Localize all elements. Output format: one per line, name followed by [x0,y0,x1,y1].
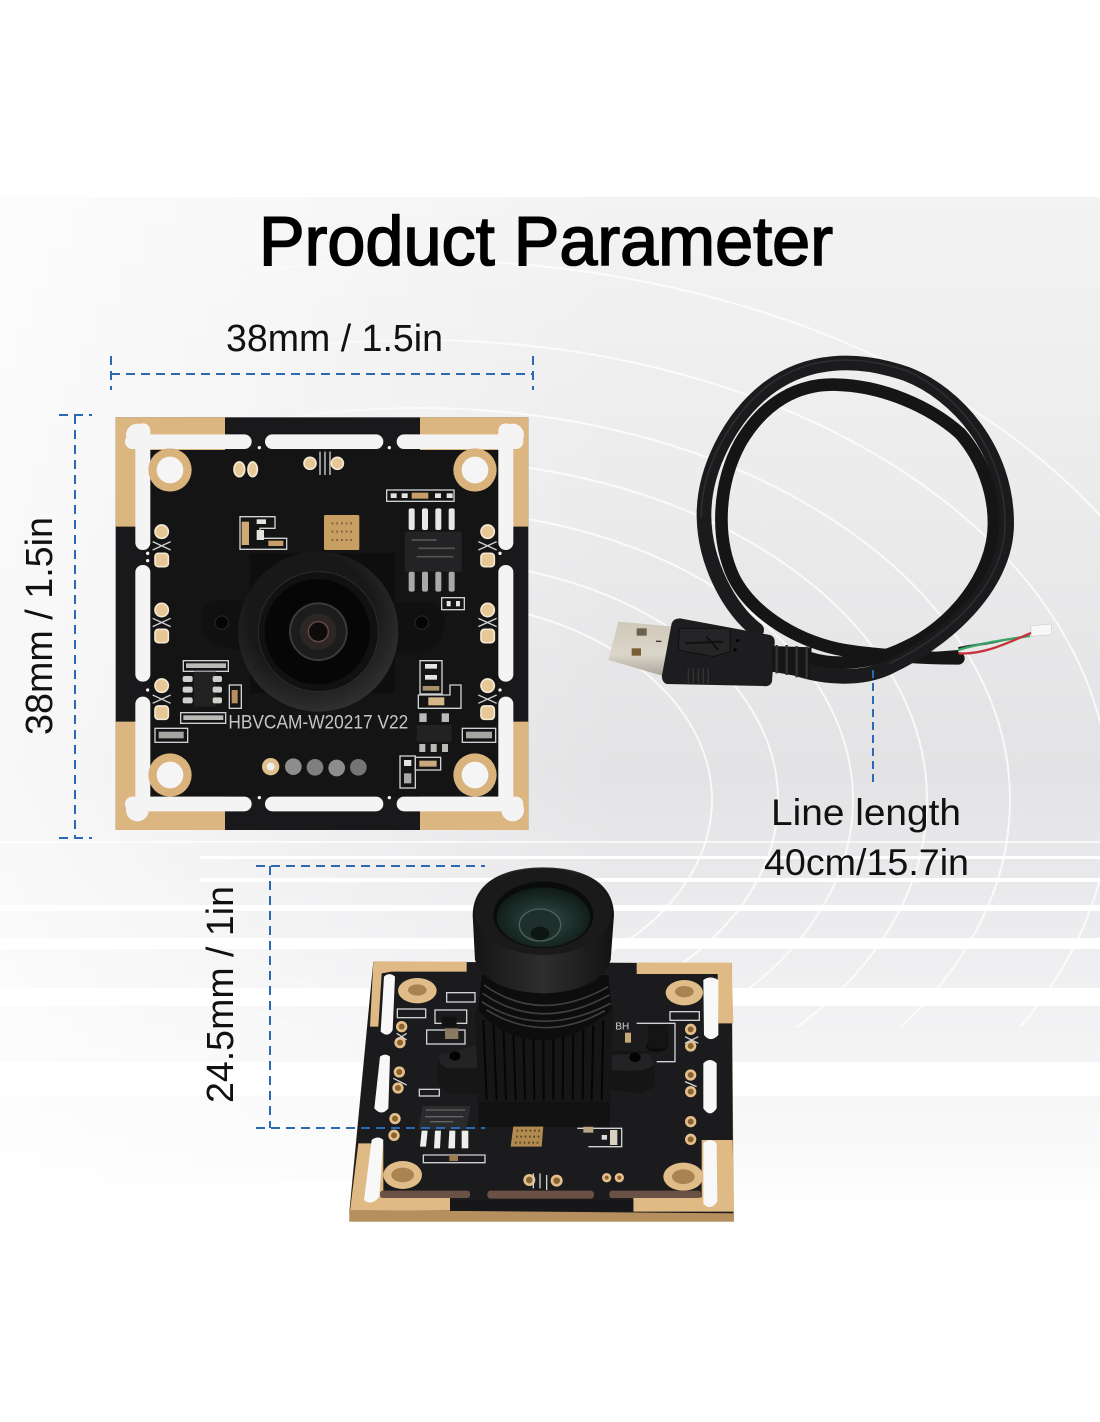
wires and connector [958,624,1052,653]
knurled holder [475,1007,613,1102]
lens cap [473,867,614,993]
gold sensor pad [511,1126,543,1147]
lens holder [202,553,445,693]
height dimension: 38mm / 1.5in [19,415,92,838]
silkscreen marks [393,993,699,1190]
USB metal shell [608,622,673,676]
solder pads [155,457,494,719]
milled slots [125,423,524,821]
USB cable [608,360,1052,686]
USB plug body [662,618,958,686]
connector solder row [262,758,367,776]
width dimension: 38mm / 1.5in [111,318,533,390]
surface components: BH [615,1021,629,1032]
height dimension: 38mm / 1.5in: 38mm / 1.5in [19,517,61,735]
height dimension: 24.5mm / 1in [200,866,485,1128]
bottom edge cutouts [380,1191,701,1199]
board text: HBVCAM-W20217 V22 [228,712,408,733]
cable loops [701,360,1007,676]
surface components [442,1017,668,1161]
memory chip [419,1106,471,1148]
cable length callout: 40cm/15.7in [764,842,969,883]
regulator lower right [417,713,452,752]
small components [159,493,492,783]
top-view camera board [116,417,528,830]
solder pads [390,1022,695,1185]
board substrate [116,417,528,830]
silkscreen marks [153,452,497,788]
height dimension: 24.5mm / 1in: 24.5mm / 1in [200,886,242,1103]
holder ears [437,1045,655,1093]
cable length callout [764,670,969,883]
lens [238,552,398,712]
memory chip SOP8 [405,508,462,592]
width dimension: 38mm / 1.5in: 38mm / 1.5in [226,318,443,360]
side-view camera board [349,867,734,1222]
mounting holes [383,978,703,1191]
threaded barrel [478,975,612,1040]
milled slots [364,974,718,1207]
mounting holes [148,448,497,797]
small IC lower left [183,672,222,707]
board substrate [349,962,734,1222]
title: Product Parameter [259,202,833,280]
gold sensor pad [324,515,359,550]
background panel [30,197,1100,1104]
lens shadow on board [478,1100,610,1127]
cable length callout: Line length [771,792,961,833]
